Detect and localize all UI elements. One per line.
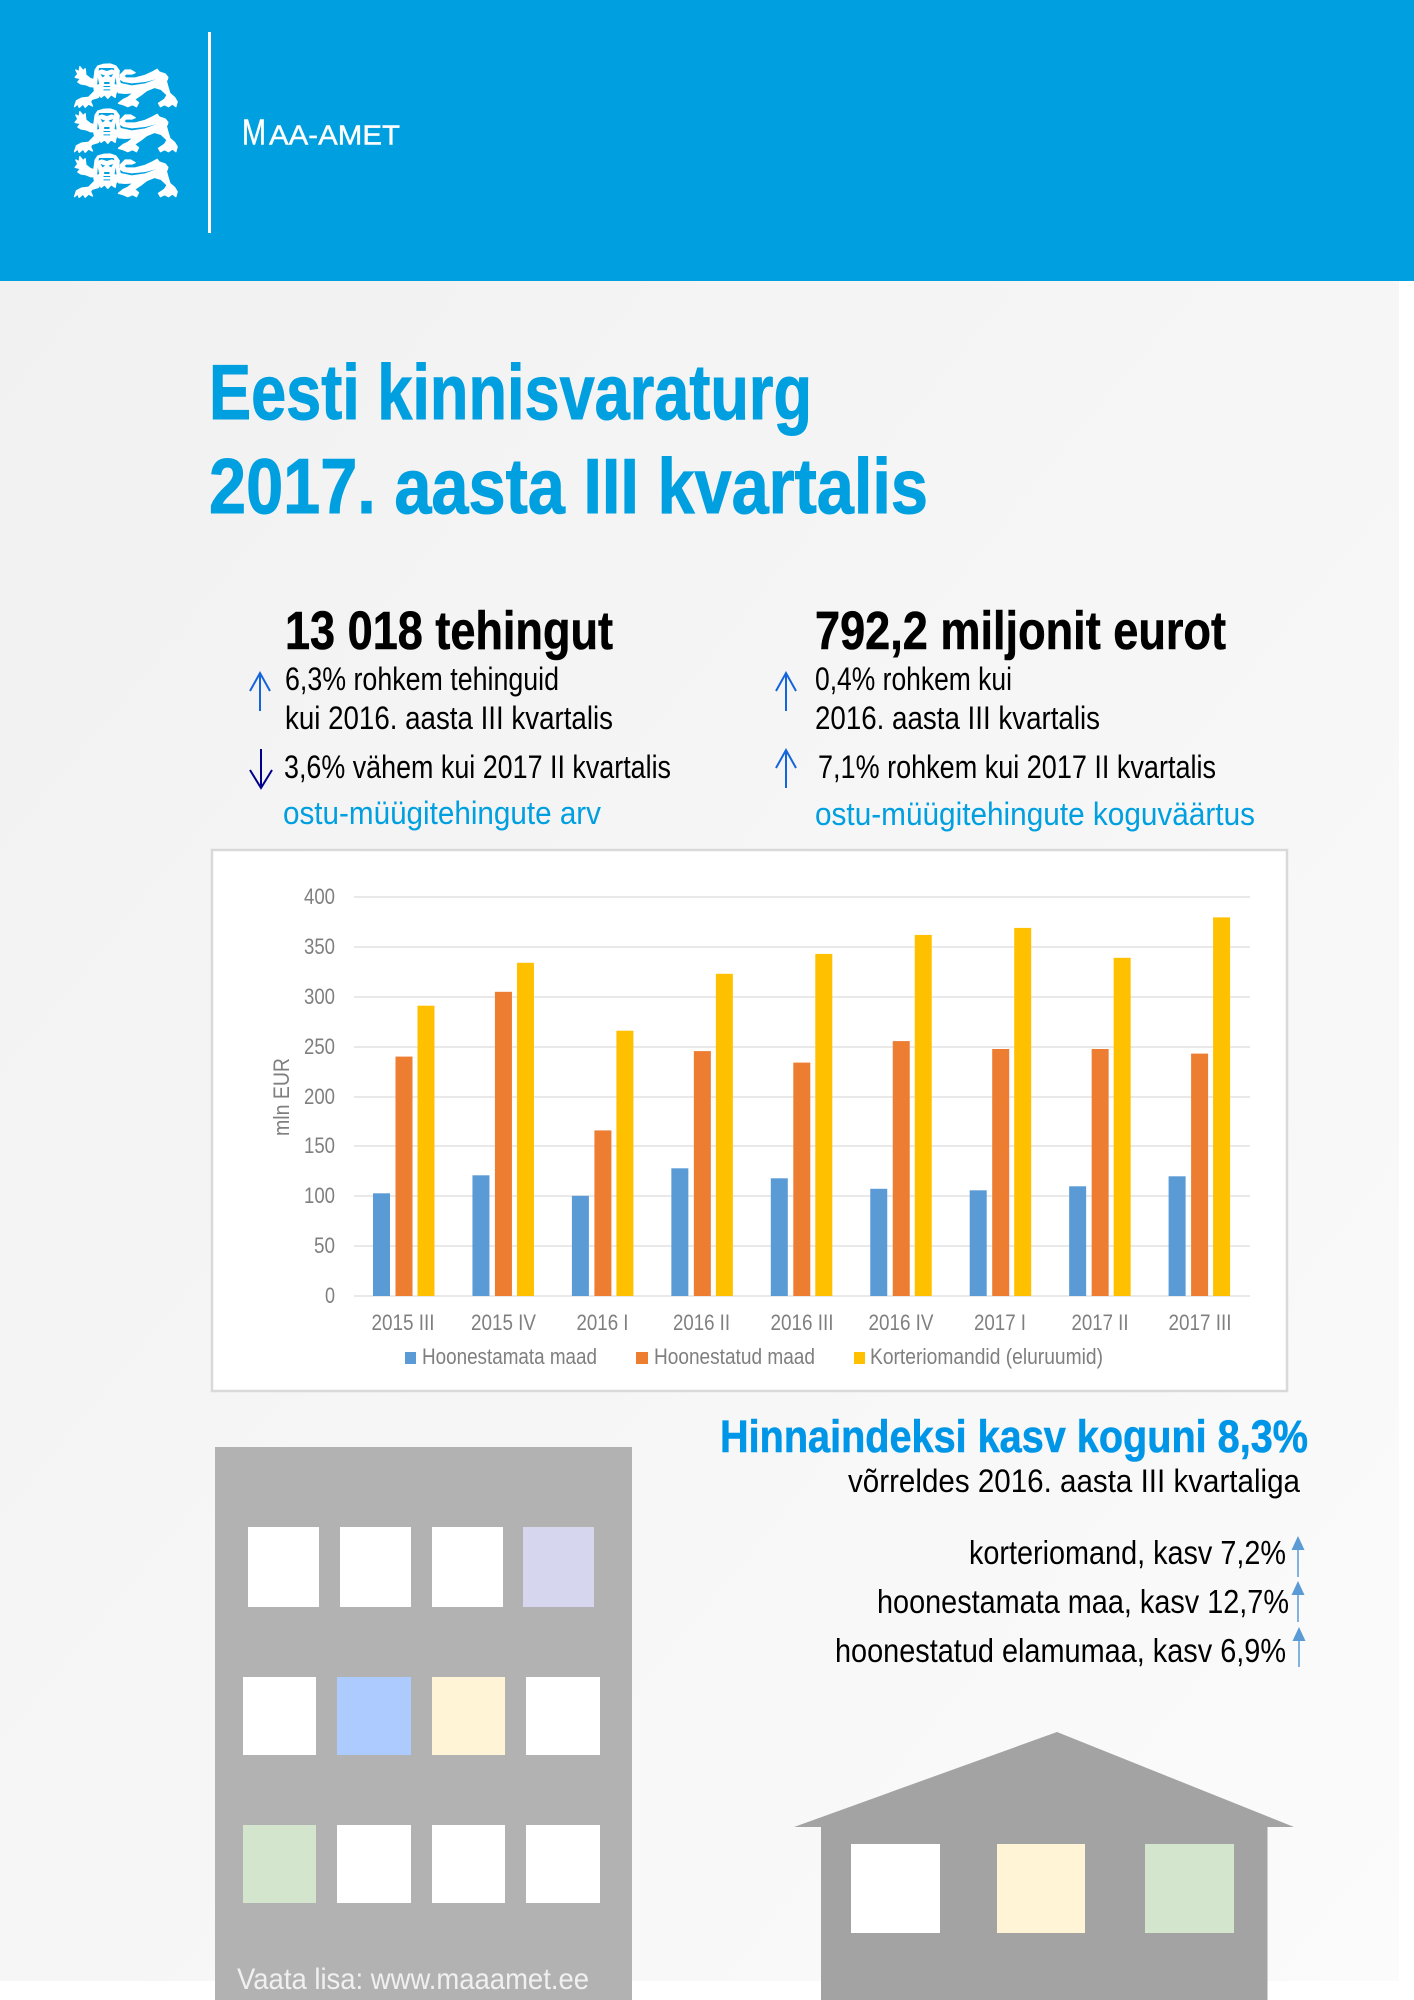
y axis labels: 100 bbox=[304, 1183, 335, 1208]
y axis labels: 200 bbox=[304, 1084, 335, 1109]
arrow up bbox=[776, 673, 796, 711]
x axis labels bbox=[372, 1310, 1232, 1335]
y axis labels: 300 bbox=[304, 984, 335, 1009]
icon: house bbox=[794, 1732, 1294, 2000]
x axis labels: 2015 IV bbox=[471, 1310, 536, 1335]
series: Korteriomandid (eluruumid) bbox=[418, 917, 1230, 1296]
logo text: M bbox=[242, 112, 266, 152]
title: Eesti kinnisvaraturg bbox=[209, 348, 812, 436]
y axis labels: 50 bbox=[314, 1233, 335, 1258]
windows bbox=[851, 1844, 1234, 1933]
panel: number of transactions bbox=[250, 601, 671, 831]
text: yearly change bbox=[285, 661, 613, 736]
logo text: AA-AMET bbox=[269, 120, 400, 150]
text: yearly change: 2016. aasta III kvartalis bbox=[815, 700, 1100, 736]
text: yearly change: 6,3% rohkem tehinguid bbox=[285, 661, 559, 697]
x axis labels: 2017 III bbox=[1168, 1310, 1232, 1335]
series: Hoonestatud maad bbox=[396, 992, 1208, 1296]
arrows: price index increases bbox=[1292, 1536, 1306, 1667]
y axis labels: 0 bbox=[325, 1283, 335, 1308]
logo text bbox=[242, 112, 400, 152]
legend: Korteriomandid (eluruumid) bbox=[870, 1344, 1103, 1369]
heading: price index: Hinnaindeksi kasv koguni 8,3% bbox=[720, 1411, 1308, 1462]
title bbox=[209, 348, 928, 530]
y axis labels: 150 bbox=[304, 1133, 335, 1158]
x axis labels: 2017 II bbox=[1072, 1310, 1128, 1335]
y axis labels bbox=[304, 884, 335, 1308]
text: transactions caption: ostu-müügitehingute arv bbox=[283, 795, 601, 831]
y axis labels: 350 bbox=[304, 934, 335, 959]
title: 2017. aasta III kvartalis bbox=[209, 442, 928, 530]
arrow up bbox=[250, 673, 270, 711]
heading: transactions: 13 018 tehingut bbox=[285, 601, 613, 661]
text: yearly change: kui 2016. aasta III kvartalis bbox=[285, 700, 613, 736]
legend bbox=[405, 1344, 1103, 1369]
arrow down bbox=[250, 749, 272, 788]
list: price index by type bbox=[835, 1534, 1289, 1669]
text: yearly change bbox=[815, 661, 1100, 736]
x axis labels: 2016 I bbox=[576, 1310, 628, 1335]
heading: total value: 792,2 miljonit eurot bbox=[815, 601, 1226, 661]
x axis labels: 2016 III bbox=[770, 1310, 834, 1335]
x axis labels: 2016 II bbox=[673, 1310, 730, 1335]
legend: Hoonestamata maad bbox=[422, 1344, 597, 1369]
y axis title: mln EUR bbox=[269, 1058, 294, 1136]
list: price index by type: hoonestamata maa, kasv 12,7% bbox=[877, 1583, 1289, 1620]
series: Hoonestamata maad bbox=[373, 1168, 1186, 1296]
list: price index by type: korteriomand, kasv 7,2% bbox=[969, 1534, 1286, 1571]
text: quarterly change: 7,1% rohkem kui 2017 II kvartalis bbox=[818, 749, 1216, 785]
text: price index comparison: võrreldes 2016. aasta III kvartaliga bbox=[848, 1463, 1300, 1499]
arrow up bbox=[776, 750, 796, 788]
text: yearly change: 0,4% rohkem kui bbox=[815, 661, 1012, 697]
text: quarterly change: 3,6% vähem kui 2017 II kvartalis bbox=[284, 749, 671, 785]
list: price index by type: hoonestatud elamumaa, kasv 6,9% bbox=[835, 1632, 1286, 1669]
header band bbox=[0, 0, 1414, 281]
y axis labels: 400 bbox=[304, 884, 335, 909]
x axis labels: 2017 I bbox=[974, 1310, 1026, 1335]
legend: Hoonestatud maad bbox=[654, 1344, 815, 1369]
x axis labels: 2016 IV bbox=[868, 1310, 934, 1335]
bar chart bbox=[212, 850, 1287, 1391]
windows bbox=[243, 1527, 600, 1903]
icon: coat of arms with three lions bbox=[74, 64, 177, 197]
footer link text: Vaata lisa: www.maaamet.ee bbox=[237, 1963, 589, 1996]
y axis labels: 250 bbox=[304, 1034, 335, 1059]
icon: apartment building bbox=[215, 1447, 632, 2000]
x axis labels: 2015 III bbox=[372, 1310, 434, 1335]
panel: total value bbox=[776, 601, 1255, 832]
text: value caption: ostu-müügitehingute koguväärtus bbox=[815, 796, 1255, 832]
